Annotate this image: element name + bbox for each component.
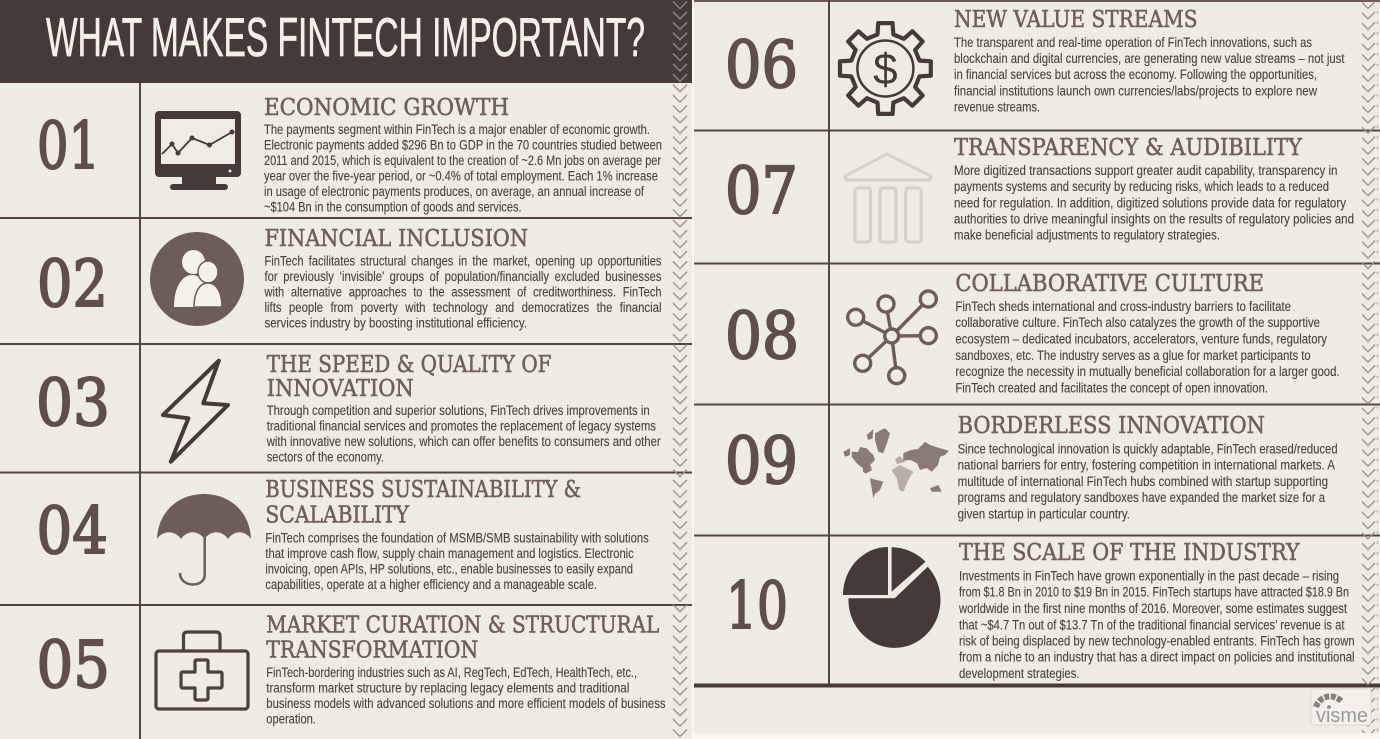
heading: INNOVATION [267, 376, 414, 402]
icon: gear with dollar sign: $ [873, 45, 898, 94]
heading: ECONOMIC GROWTH [264, 95, 509, 121]
heading [265, 477, 581, 529]
number 02: 02 [37, 247, 108, 322]
body text: FinTech comprises the foundation of MSMB/SMB sustainability with solutions [265, 530, 649, 546]
heading: TRANSPARENCY & AUDIBILITY [954, 135, 1303, 161]
body text: The transparent and real-time operation of FinTech innovations, such as [954, 35, 1312, 50]
body text: traditional financial services and promotes the replacement of legacy systems [267, 418, 656, 434]
body text: invoicing, open APIs, HP solutions, etc., enable businesses to easily expand [265, 562, 633, 576]
heading: FINANCIAL INCLUSION [264, 226, 528, 252]
number 01: 01 [37, 109, 100, 184]
icon: network nodes [848, 291, 936, 384]
body text: year over the five-year period, or ~0.4% of total employment. Each 1% increase [264, 168, 658, 184]
number 07: 07 [725, 154, 798, 229]
body text: financial institutions launch own currencies/labs/projects to explore new [954, 83, 1317, 98]
heading: MARKET CURATION & STRUCTURAL [266, 613, 659, 639]
body text: development strategies. [959, 666, 1080, 681]
heading: COLLABORATIVE CULTURE [955, 271, 1264, 297]
body text: transform market structure by replacing legacy elements and traditional [266, 680, 629, 696]
body text: FinTech created and facilitates the concept of open innovation. [955, 380, 1268, 395]
body text: sectors of the economy. [267, 450, 384, 464]
logo: visme watermark [1311, 689, 1371, 727]
icon: people in a circle [150, 232, 244, 326]
body text: in financial services but across the economy. Following the opportunities, [954, 67, 1317, 82]
body text: revenue streams. [954, 100, 1040, 115]
panel: 02 financial inclusion [37, 226, 662, 330]
icon: lightning bolt [163, 361, 228, 462]
body text: lifts people from poverty with technology and democratizes the financial [264, 300, 662, 315]
icon: umbrella [157, 494, 251, 585]
body text: in usage of electronic payments produces, on average, an annual increase of [264, 184, 644, 199]
panel: 08 collaborative culture [725, 271, 1340, 395]
panel: 07 transparency and audibility [725, 135, 1354, 243]
body text: 2011 and 2015, which is equivalent to the creation of ~2.6 Mn jobs on average per [264, 153, 661, 168]
icon: first aid kit [156, 632, 248, 709]
body text [954, 35, 1345, 115]
panel: 09 borderless innovation [725, 413, 1338, 522]
body text: sandboxes, etc. The industry serves as a glue for market participants to [955, 348, 1311, 363]
body text: FinTech sheds international and cross-industry barriers to facilitate [955, 299, 1291, 314]
body text [955, 299, 1340, 395]
panel: 10 the scale of the industry [726, 540, 1355, 681]
body text: for previously ‘invisible’ groups of population/financially excluded businesses [264, 269, 662, 284]
body text: collaborative culture. FinTech also catalyzes the growth of the supportive [955, 315, 1320, 330]
body text: operation. [266, 712, 316, 726]
heading: THE SPEED & QUALITY OF [267, 352, 552, 378]
number 08: 08 [725, 299, 799, 374]
body text: business models with advanced solutions and more efficient models of business [266, 696, 666, 711]
body text [954, 163, 1354, 243]
icon: gear with dollar sign [840, 23, 931, 114]
body text: given startup in particular country. [958, 507, 1130, 522]
number 10: 10 [726, 569, 788, 644]
heading: THE SCALE OF THE INDUSTRY [959, 540, 1300, 566]
heading: BUSINESS SUSTAINABILITY & [265, 477, 581, 503]
heading: TRANSFORMATION [266, 638, 478, 664]
body text [958, 569, 1355, 681]
body text: Electronic payments added $296 Bn to GDP in the 70 countries studied between [264, 138, 662, 152]
number 05: 05 [36, 628, 110, 703]
number 09: 09 [725, 424, 798, 499]
number 04: 04 [36, 494, 108, 569]
body text [265, 530, 649, 592]
icon: bank columns [845, 154, 931, 242]
body text [958, 442, 1338, 522]
panel: 01 economic growth [37, 95, 662, 214]
body text: capabilities, operate at a higher efficiency and a manageable scale. [265, 577, 597, 592]
body text: multitude of international FinTech hubs combined with startup supporting [958, 474, 1328, 489]
body text [264, 254, 662, 330]
heading: BORDERLESS INNOVATION [958, 413, 1265, 439]
body text [266, 665, 666, 726]
body text [266, 403, 661, 464]
number 03: 03 [36, 366, 110, 441]
body text: with alternative approaches to the assessment of creditworthiness. FinTech [264, 284, 662, 300]
icon: pie chart [843, 547, 940, 648]
body text [264, 122, 662, 214]
body text: that improve cash flow, supply chain management and logistics. Electronic [265, 546, 634, 561]
heading [267, 352, 552, 402]
panel: 06 new value streams [725, 7, 1345, 115]
number 06: 06 [725, 28, 798, 103]
body text: FinTech-bordering industries such as AI, RegTech, EdTech, HealthTech, etc., [266, 665, 637, 680]
body text: Through competition and superior solutions, FinTech drives improvements in [267, 403, 650, 418]
logo: visme watermark: visme [1316, 705, 1368, 727]
icon: computer monitor with line chart [155, 111, 241, 190]
heading: NEW VALUE STREAMS [954, 7, 1198, 33]
icon: world map [843, 428, 949, 498]
body text: with innovative new solutions, which can offer benefits to consumers and other [266, 434, 661, 449]
body text: make beneficial adjustments to regulatory strategies. [954, 228, 1220, 243]
heading [266, 613, 659, 664]
panel: 05 market curation and structural transformation [36, 613, 666, 726]
body text: services industry by boosting institutional efficiency. [264, 316, 527, 330]
body text: ~$104 Bn in the consumption of goods and services. [264, 200, 522, 214]
heading: SCALABILITY [265, 503, 410, 529]
title: WHAT MAKES FINTECH IMPORTANT? [46, 6, 645, 68]
body text: FinTech facilitates structural changes in the market, opening up opportunities [264, 254, 662, 268]
panel: 03 speed and quality of innovation [36, 352, 661, 464]
panel: 04 business sustainability and scalability [36, 477, 649, 592]
body text: The payments segment within FinTech is a major enabler of economic growth. [264, 122, 650, 137]
